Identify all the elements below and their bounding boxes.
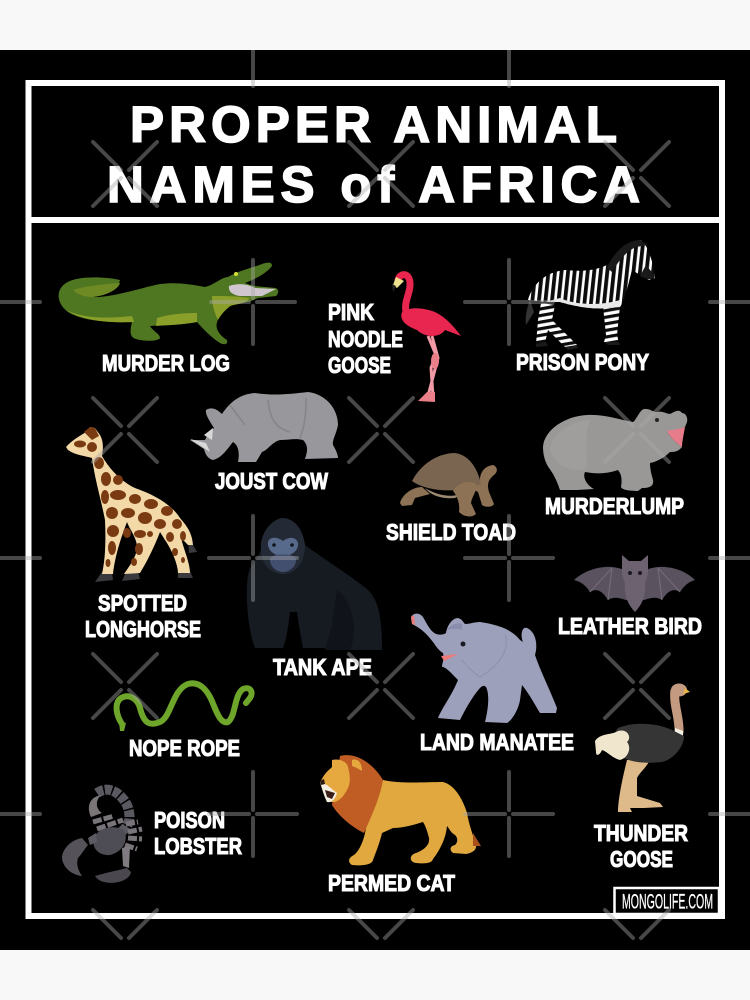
icon: snake — [117, 683, 252, 731]
label: spotted longhorse: LONGHORSE — [85, 616, 201, 642]
label: prison pony: PRISON PONY — [516, 349, 649, 375]
icon: hippo — [543, 409, 687, 491]
icon: scorpion — [62, 790, 142, 883]
label: leather bird: LEATHER BIRD — [558, 613, 702, 639]
label: poison lobster: LOBSTER — [154, 833, 242, 859]
icon: tortoise — [400, 453, 497, 516]
title — [107, 96, 640, 213]
credit badge: mongolife.com — [614, 888, 719, 914]
label: permed cat: PERMED CAT — [328, 870, 455, 896]
label: murder log: MURDER LOG — [102, 350, 230, 376]
label: shield toad: SHIELD TOAD — [386, 519, 516, 545]
label: pink noodle goose: PINK — [328, 299, 374, 325]
label: nope rope: NOPE ROPE — [129, 735, 240, 761]
title: PROPER ANIMAL — [130, 96, 617, 153]
label: thunder goose: GOOSE — [610, 846, 673, 872]
icon: flamingo — [392, 275, 461, 402]
title divider — [28, 217, 722, 223]
label: thunder goose — [594, 820, 688, 872]
label: pink noodle goose: NOODLE — [328, 326, 403, 352]
icon: lion — [320, 755, 481, 865]
white outer frame — [28, 83, 722, 916]
icon: giraffe — [66, 427, 197, 582]
icon: crocodile — [59, 263, 278, 344]
label: spotted longhorse: SPOTTED — [98, 590, 187, 616]
icon: zebra — [526, 240, 655, 350]
label: joust cow: JOUST COW — [215, 468, 328, 494]
label: murderlump: MURDERLUMP — [545, 493, 684, 519]
label: poison lobster — [154, 807, 242, 859]
icon: rhinoceros — [190, 392, 338, 462]
label: thunder goose: THUNDER — [594, 820, 688, 846]
label: poison lobster: POISON — [154, 807, 225, 833]
icon: ostrich — [595, 684, 690, 812]
label: tank ape: TANK APE — [273, 654, 372, 680]
label: spotted longhorse — [85, 590, 201, 642]
icon: elephant — [411, 614, 557, 723]
icon: gorilla — [247, 518, 382, 650]
label: pink noodle goose — [328, 299, 403, 378]
label: pink noodle goose: GOOSE — [328, 352, 391, 378]
icon: bat — [574, 555, 695, 612]
title: NAMES of AFRICA — [107, 156, 640, 213]
label: land manatee: LAND MANATEE — [420, 729, 574, 755]
